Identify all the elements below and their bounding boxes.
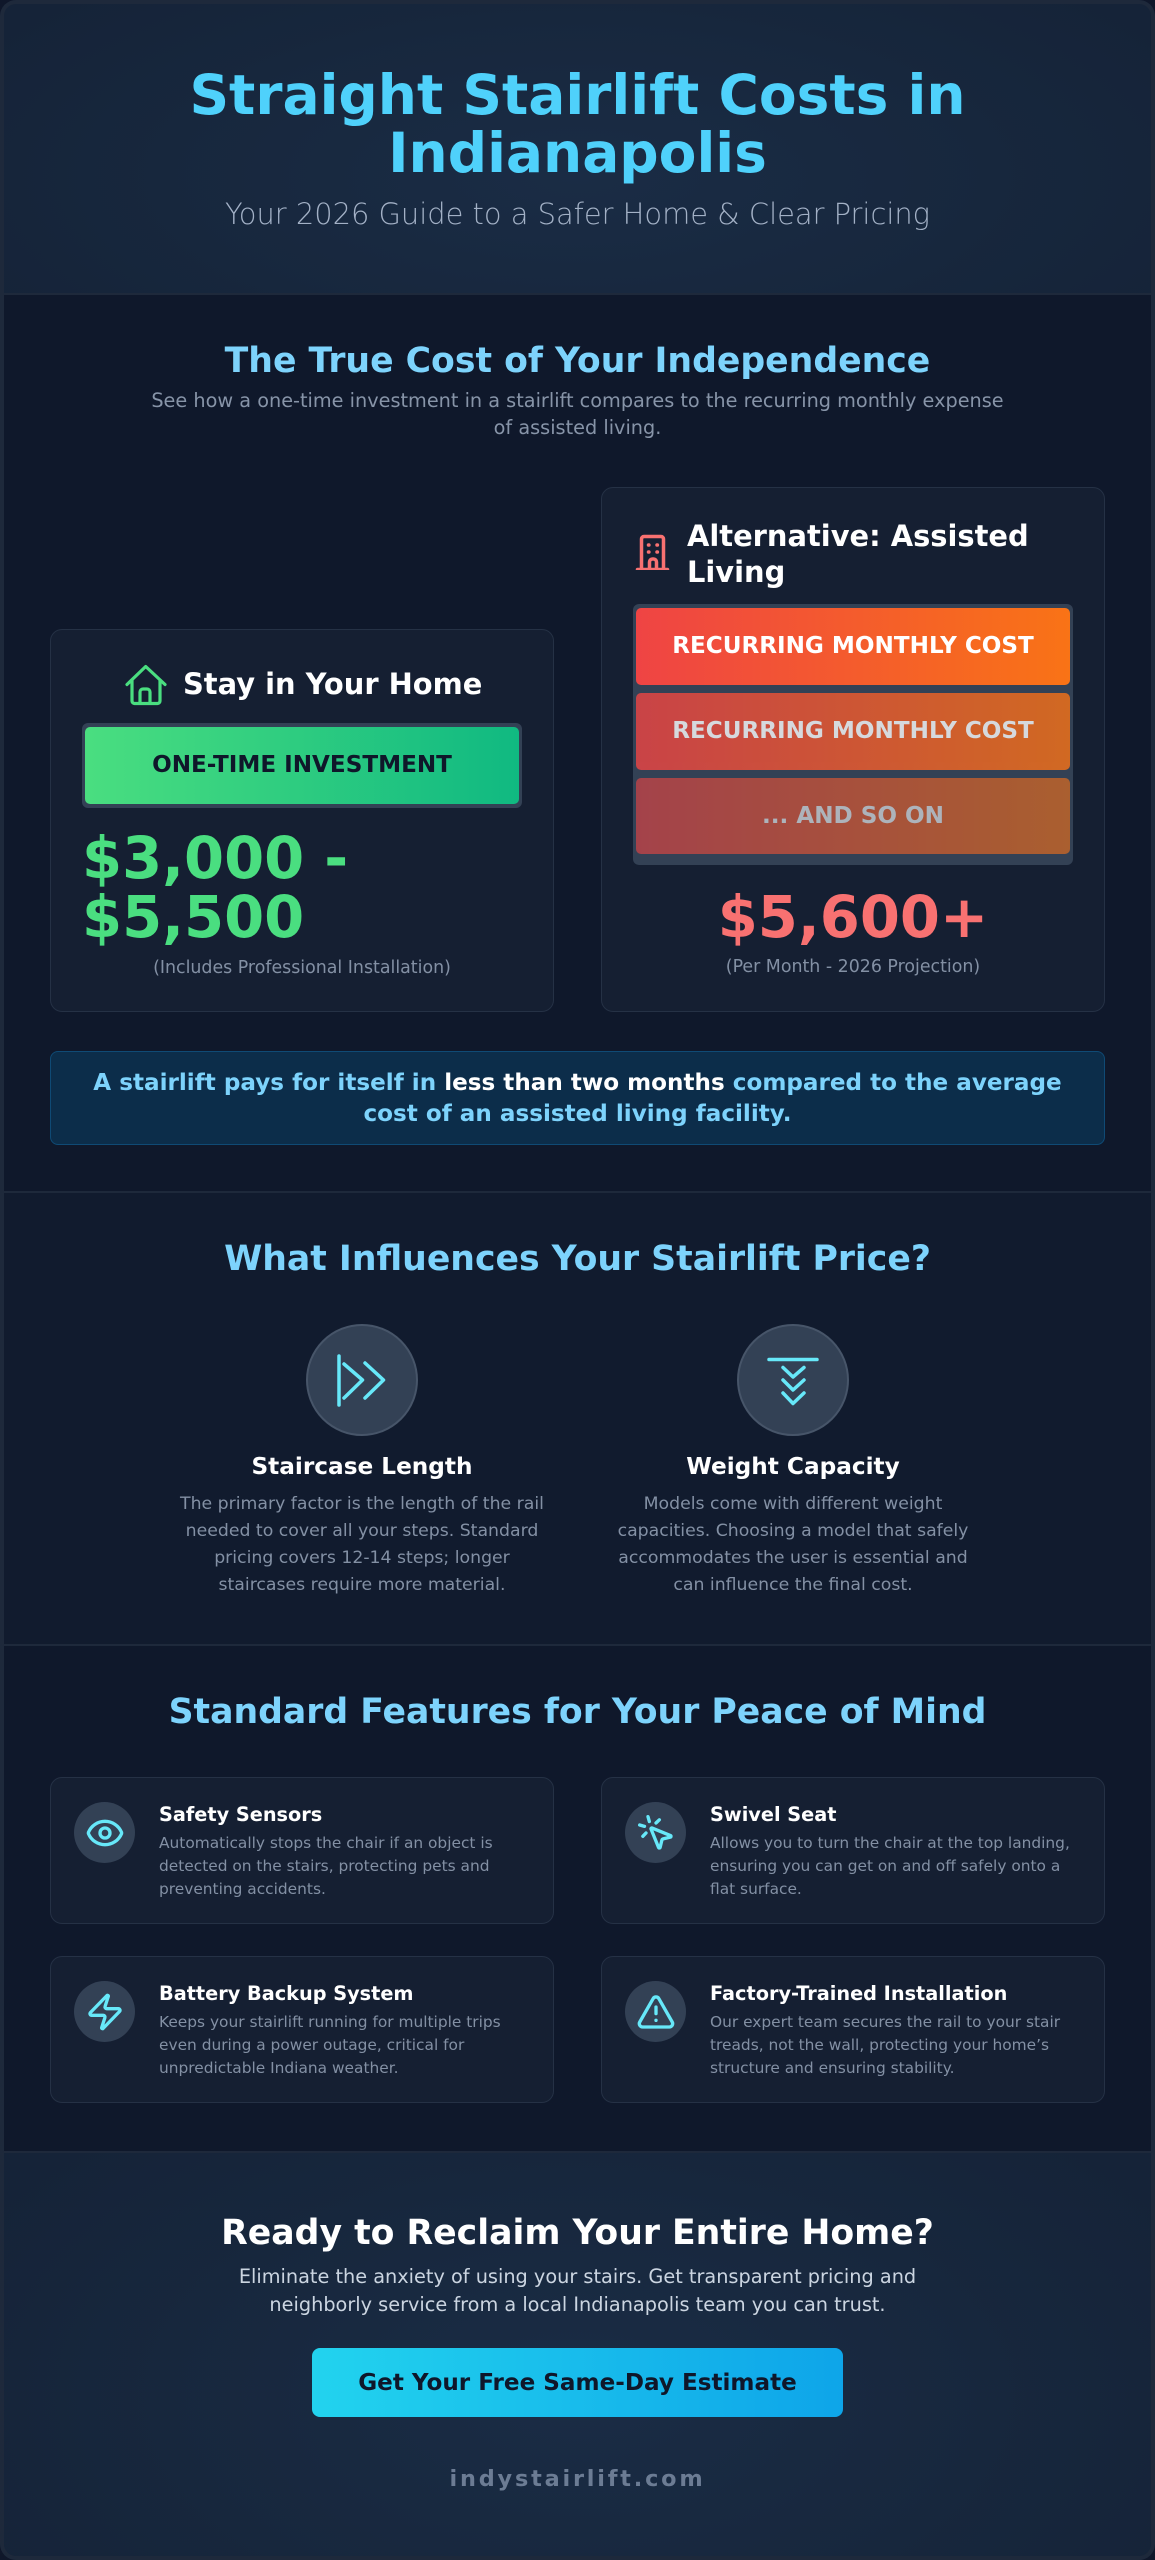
bar: recurring cost 2: RECURRING MONTHLY COST — [672, 718, 1034, 744]
heading: true cost: The True Cost of Your Independence — [225, 341, 930, 381]
factor title: Weight Capacity — [686, 1453, 900, 1480]
feature text: unpredictable Indiana weather. — [159, 2059, 399, 2077]
icon: house — [125, 664, 167, 706]
panel: call to action — [0, 2153, 1155, 2560]
factor text: can influence the final cost. — [673, 1575, 913, 1595]
feature text: preventing accidents. — [159, 1880, 326, 1898]
intro text: of assisted living. — [494, 416, 661, 439]
bar: recurring cost 1: RECURRING MONTHLY COST — [672, 633, 1034, 659]
feature text: structure and ensuring stability. — [710, 2059, 955, 2077]
heading: price factors: What Influences Your Stairlift Price? — [224, 1239, 931, 1279]
title: Indianapolis — [388, 121, 767, 185]
feature text: ensuring you can get on and off safely onto a — [710, 1857, 1060, 1875]
feature card: safety sensors — [50, 1777, 554, 1924]
intro text: See how a one-time investment in a stairlift compares to the recurring monthly expense — [151, 389, 1004, 412]
website: indystairlift.com — [450, 2466, 705, 2492]
card heading: Alternative: Assisted — [687, 519, 1029, 553]
feature text: even during a power outage, critical for — [159, 2036, 464, 2054]
panel: standard features — [0, 1646, 1155, 2153]
bar: one-time investment — [82, 723, 522, 808]
factor text: staircases require more material. — [219, 1575, 505, 1595]
feature text: Keeps your stairlift running for multiple trips — [159, 2013, 501, 2031]
factor: staircase length — [180, 1324, 544, 1595]
factor text: Models come with different weight — [644, 1494, 942, 1514]
icon: weight arrows — [737, 1324, 849, 1436]
factor text: pricing covers 12-14 steps; longer — [214, 1548, 510, 1568]
feature text: Our expert team secures the rail to your stair — [710, 2013, 1060, 2031]
cta heading: Ready to Reclaim Your Entire Home? — [221, 2213, 934, 2253]
bar: and so on — [636, 778, 1070, 854]
factor title: Staircase Length — [251, 1453, 472, 1480]
factor text: The primary factor is the length of the rail — [180, 1494, 544, 1514]
feature title: Swivel Seat — [710, 1803, 836, 1826]
feature text: Automatically stops the chair if an object is — [159, 1834, 493, 1852]
bar label — [85, 727, 519, 804]
factor: weight capacity — [618, 1324, 968, 1595]
cta text: neighborly service from a local Indianapolis team you can trust. — [269, 2293, 886, 2316]
title: Straight Stairlift Costs in — [189, 63, 966, 127]
header panel — [0, 0, 1155, 295]
feature title: Safety Sensors — [159, 1803, 322, 1826]
factor text: needed to cover all your steps. Standard — [186, 1521, 538, 1541]
caption: (Per Month - 2026 Projection) — [726, 957, 980, 977]
icon: eye — [74, 1802, 135, 1863]
factor text: accommodates the user is essential and — [618, 1548, 968, 1568]
caption: (Includes Professional Installation) — [153, 958, 451, 978]
callout text: A stairlift pays for itself in less than two months compared to the average — [93, 1070, 1062, 1096]
icon: rail arrows — [306, 1324, 418, 1436]
cta text — [239, 2265, 916, 2316]
factor text: capacities. Choosing a model that safely — [618, 1521, 968, 1541]
price: assisted living: $5,600+ — [718, 884, 988, 950]
icon: building — [636, 534, 670, 570]
callout text — [93, 1070, 1062, 1127]
icon: warning triangle — [625, 1981, 686, 2042]
subtitle: Your 2026 Guide to a Safer Home & Clear Pricing — [225, 196, 930, 230]
bar: and so on: ... AND SO ON — [762, 803, 944, 829]
feature text — [710, 2013, 1060, 2077]
factor text — [618, 1494, 968, 1595]
icon: lightning bolt — [74, 1981, 135, 2042]
cta button — [312, 2348, 843, 2417]
card: stay in your home — [50, 629, 554, 1012]
title — [189, 63, 966, 185]
feature card: installation — [601, 1956, 1105, 2103]
feature text — [159, 2013, 501, 2077]
feature card: battery backup — [50, 1956, 554, 2103]
bar: recurring cost 1 — [636, 608, 1070, 685]
callout text: cost of an assisted living facility. — [363, 1101, 792, 1127]
panel: true cost comparison — [0, 295, 1155, 1193]
panel: price factors — [0, 1193, 1155, 1646]
feature text: Allows you to turn the chair at the top landing, — [710, 1834, 1070, 1852]
feature text — [159, 1834, 493, 1898]
feature text: detected on the stairs, protecting pets and — [159, 1857, 489, 1875]
card heading: Stay in Your Home — [183, 666, 482, 700]
feature text: flat surface. — [710, 1880, 802, 1898]
bar label: ONE-TIME INVESTMENT — [152, 752, 452, 778]
price: stairlift — [82, 825, 348, 950]
cta button: Get Your Free Same-Day Estimate — [358, 2370, 797, 2396]
card heading — [687, 519, 1029, 589]
stacked monthly cost bars — [633, 604, 1073, 865]
callout: payback — [50, 1051, 1105, 1145]
price: stairlift: $5,500 — [82, 884, 304, 950]
factor text — [180, 1494, 544, 1595]
feature text — [710, 1834, 1070, 1898]
heading: features: Standard Features for Your Peace of Mind — [169, 1692, 986, 1732]
feature text: treads, not the wall, protecting your home’s — [710, 2036, 1049, 2054]
feature title: Battery Backup System — [159, 1982, 414, 2005]
feature title: Factory-Trained Installation — [710, 1982, 1007, 2005]
intro text — [151, 389, 1004, 439]
card: assisted living — [601, 487, 1105, 1012]
price: stairlift: $3,000 - — [82, 825, 348, 892]
card heading: Living — [687, 555, 785, 589]
cta text: Eliminate the anxiety of using your stairs. Get transparent pricing and — [239, 2265, 916, 2288]
bar: recurring cost 2 — [636, 693, 1070, 770]
feature card: swivel seat — [601, 1777, 1105, 1924]
icon: pointer click — [625, 1802, 686, 1863]
